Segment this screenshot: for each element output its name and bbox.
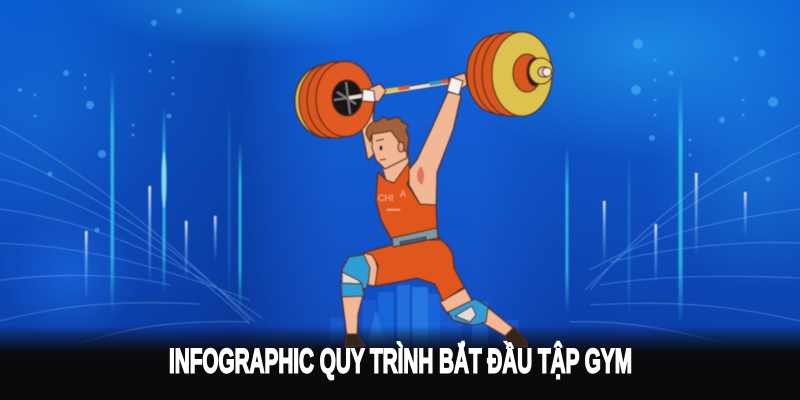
head xyxy=(366,117,409,169)
background: vertical light streaks xyxy=(85,70,746,325)
neck xyxy=(380,152,409,183)
background: curved network lines xyxy=(0,125,800,350)
singlet xyxy=(376,160,439,240)
right arm raised xyxy=(409,92,461,205)
singlet: CHI xyxy=(378,193,394,203)
belt xyxy=(392,228,438,247)
shorts xyxy=(363,238,464,301)
background: glowing dots xyxy=(18,8,778,232)
back leg xyxy=(341,253,378,347)
front leg xyxy=(440,288,527,347)
singlet: A xyxy=(400,189,406,199)
background: city skyline xyxy=(330,285,518,350)
barbell bar xyxy=(348,79,451,100)
left barbell plates xyxy=(295,62,374,138)
left arm raised xyxy=(362,97,378,160)
illustration: weightlifter xyxy=(295,32,553,347)
right barbell plates xyxy=(467,32,553,116)
bottom dark fade band xyxy=(0,326,800,400)
left hand with wrist wrap xyxy=(362,84,386,102)
right hand with wrist wrap xyxy=(447,73,467,95)
armpit shading xyxy=(417,166,424,185)
